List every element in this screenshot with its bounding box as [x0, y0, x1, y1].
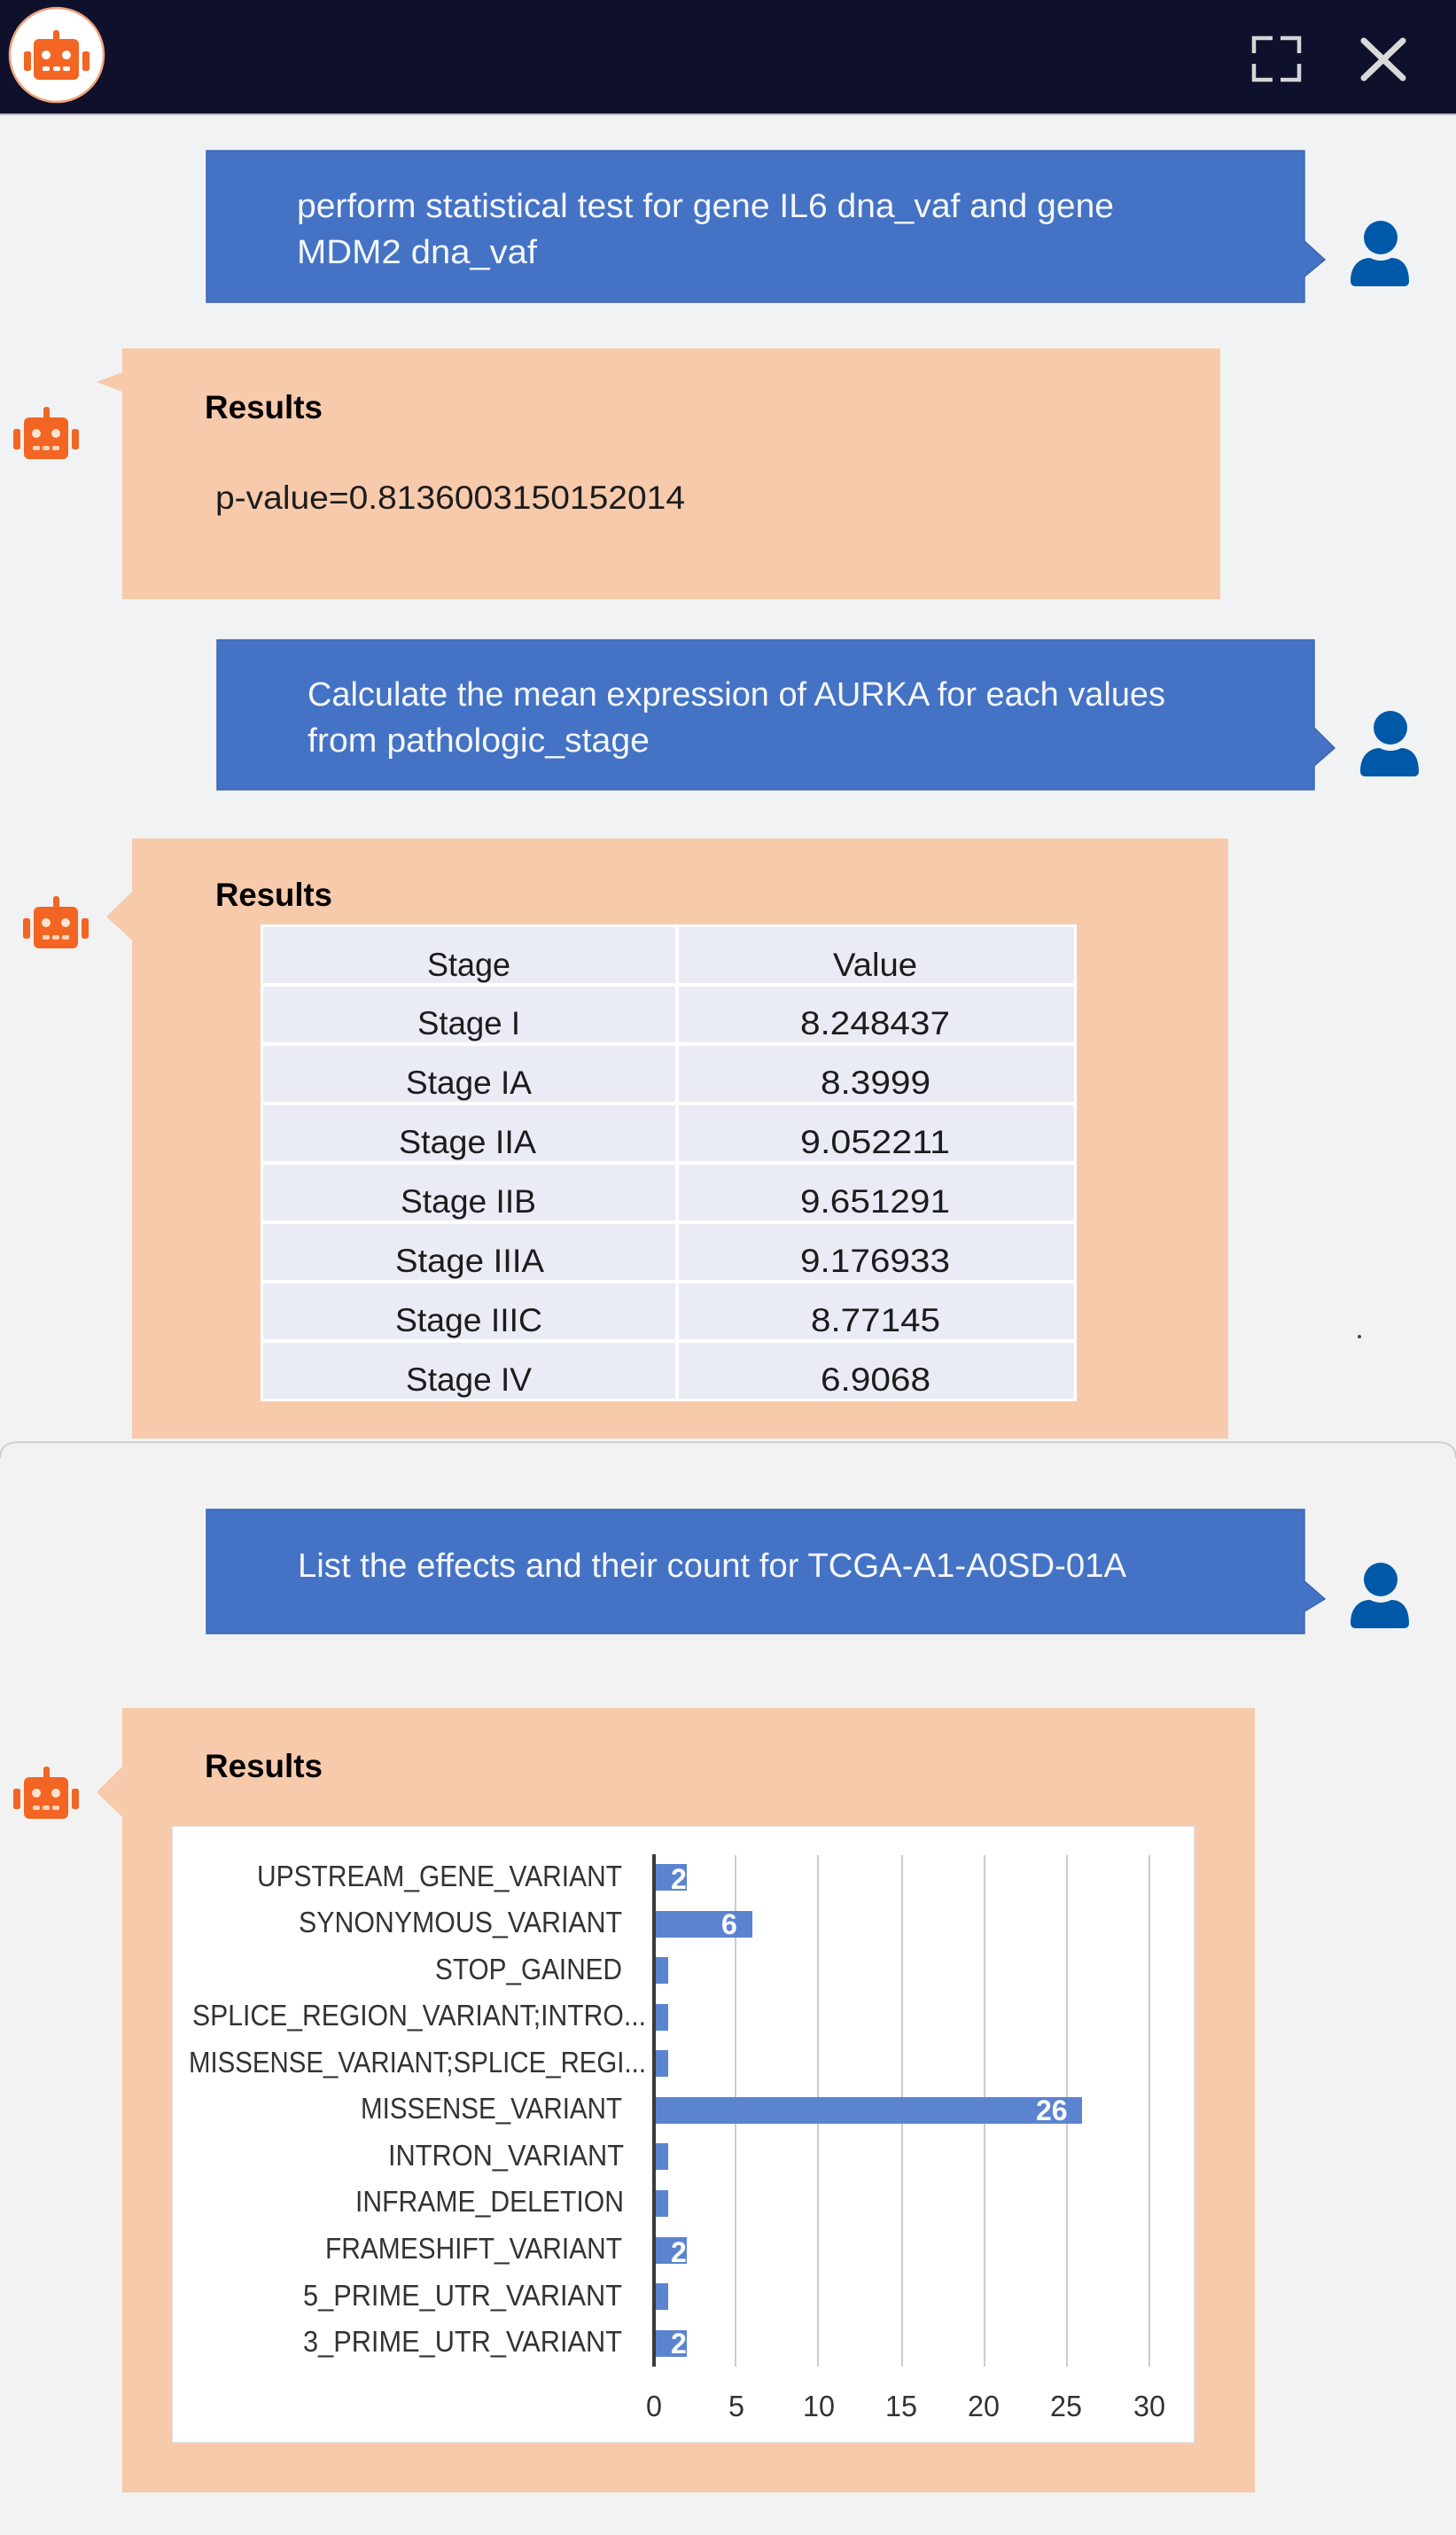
- table: stage values: 9.052211: [800, 1124, 950, 1160]
- icon: user 1: [1351, 221, 1409, 286]
- user message 2: Calculate the mean expression of AURKA for each values: [308, 676, 1165, 714]
- user message 3: [206, 1509, 1325, 1634]
- category labels: 5_PRIME_UTR_VARIANT: [303, 2279, 622, 2312]
- x axis labels: 0: [646, 2390, 662, 2422]
- table: stage values: 8.248437: [800, 1005, 950, 1041]
- x axis labels: 10: [803, 2390, 835, 2422]
- bar value labels: [671, 1863, 1068, 2360]
- icon: robot logo: [10, 8, 104, 102]
- user message 1: MDM2 dna_vaf: [297, 234, 537, 271]
- bar value labels: 2: [671, 1863, 687, 1895]
- user message 1: [206, 151, 1325, 302]
- user message 3: List the effects and their count for TCGA-A1-A0SD-01A: [298, 1548, 1127, 1585]
- user message 2: from pathologic_stage: [308, 722, 650, 760]
- category labels: FRAMESHIFT_VARIANT: [325, 2232, 622, 2265]
- user message 2: [217, 640, 1335, 790]
- icon: user 2: [1360, 711, 1419, 776]
- table: stage values: Stage I: [417, 1005, 520, 1041]
- bot reply 1: p-value=0.8136003150152014: [215, 480, 685, 516]
- lower chat panel background: [0, 1442, 1456, 2535]
- bot reply 3: Results: [205, 1748, 323, 1784]
- stray dot: [1358, 1335, 1361, 1338]
- category labels: MISSENSE_VARIANT: [361, 2092, 622, 2125]
- bar value labels: 2: [671, 2328, 687, 2360]
- category labels: SYNONYMOUS_VARIANT: [299, 1906, 622, 1938]
- bot reply 1: [97, 348, 1220, 599]
- bar chart: effects count: [172, 1826, 1195, 2443]
- bot reply 3: [97, 1708, 1255, 2492]
- x axis labels: 5: [728, 2390, 744, 2422]
- category labels: SPLICE_REGION_VARIANT;INTRO...: [192, 1999, 646, 2032]
- category labels: INTRON_VARIANT: [388, 2139, 624, 2172]
- table: stage values: Stage IIB: [401, 1183, 536, 1220]
- icon: fullscreen: [1254, 38, 1299, 80]
- x axis labels: 15: [885, 2390, 917, 2422]
- table: stage values: 9.176933: [800, 1243, 950, 1279]
- header bar: [0, 0, 1456, 115]
- bot reply 2: [106, 838, 1228, 1439]
- table: stage values: 8.3999: [821, 1065, 930, 1101]
- icon: robot 2: [23, 896, 89, 948]
- icon: robot 1: [13, 407, 79, 459]
- bars: [654, 1864, 1082, 2357]
- bar value labels: 26: [1036, 2094, 1068, 2126]
- table: stage values: 6.9068: [821, 1361, 930, 1398]
- table: stage values: Stage IV: [406, 1361, 532, 1398]
- user message 1: perform statistical test for gene IL6 dna_vaf and gene: [297, 188, 1114, 225]
- table: stage values: Stage IIIA: [395, 1243, 544, 1279]
- table: stage values: Stage IA: [406, 1065, 532, 1101]
- category labels: MISSENSE_VARIANT;SPLICE_REGI...: [189, 2046, 646, 2079]
- table: stage values: 8.77145: [811, 1302, 940, 1338]
- bot reply 1: Results: [205, 389, 323, 425]
- category labels: INFRAME_DELETION: [355, 2185, 624, 2218]
- x axis labels: 25: [1050, 2390, 1082, 2422]
- icon: user 3: [1351, 1563, 1409, 1628]
- table: stage values: Stage: [427, 947, 510, 983]
- icon: robot 3: [13, 1767, 79, 1819]
- category labels: 3_PRIME_UTR_VARIANT: [303, 2325, 622, 2358]
- category labels: UPSTREAM_GENE_VARIANT: [257, 1860, 622, 1892]
- x axis labels: [646, 2390, 1165, 2422]
- table: stage values: 9.651291: [800, 1183, 950, 1220]
- category labels: [189, 1860, 646, 2358]
- bar value labels: 6: [721, 1908, 737, 1940]
- x axis labels: 20: [968, 2390, 1000, 2422]
- category labels: STOP_GAINED: [435, 1953, 622, 1985]
- x axis labels: 30: [1133, 2390, 1165, 2422]
- bot reply 2: Results: [215, 877, 332, 913]
- table: stage values: Value: [833, 947, 917, 983]
- table: stage values: Stage IIA: [399, 1124, 536, 1160]
- bar value labels: 2: [671, 2236, 687, 2268]
- table: stage values: [261, 924, 1077, 1401]
- table: stage values: Stage IIIC: [395, 1302, 542, 1338]
- icon: close: [1364, 41, 1403, 78]
